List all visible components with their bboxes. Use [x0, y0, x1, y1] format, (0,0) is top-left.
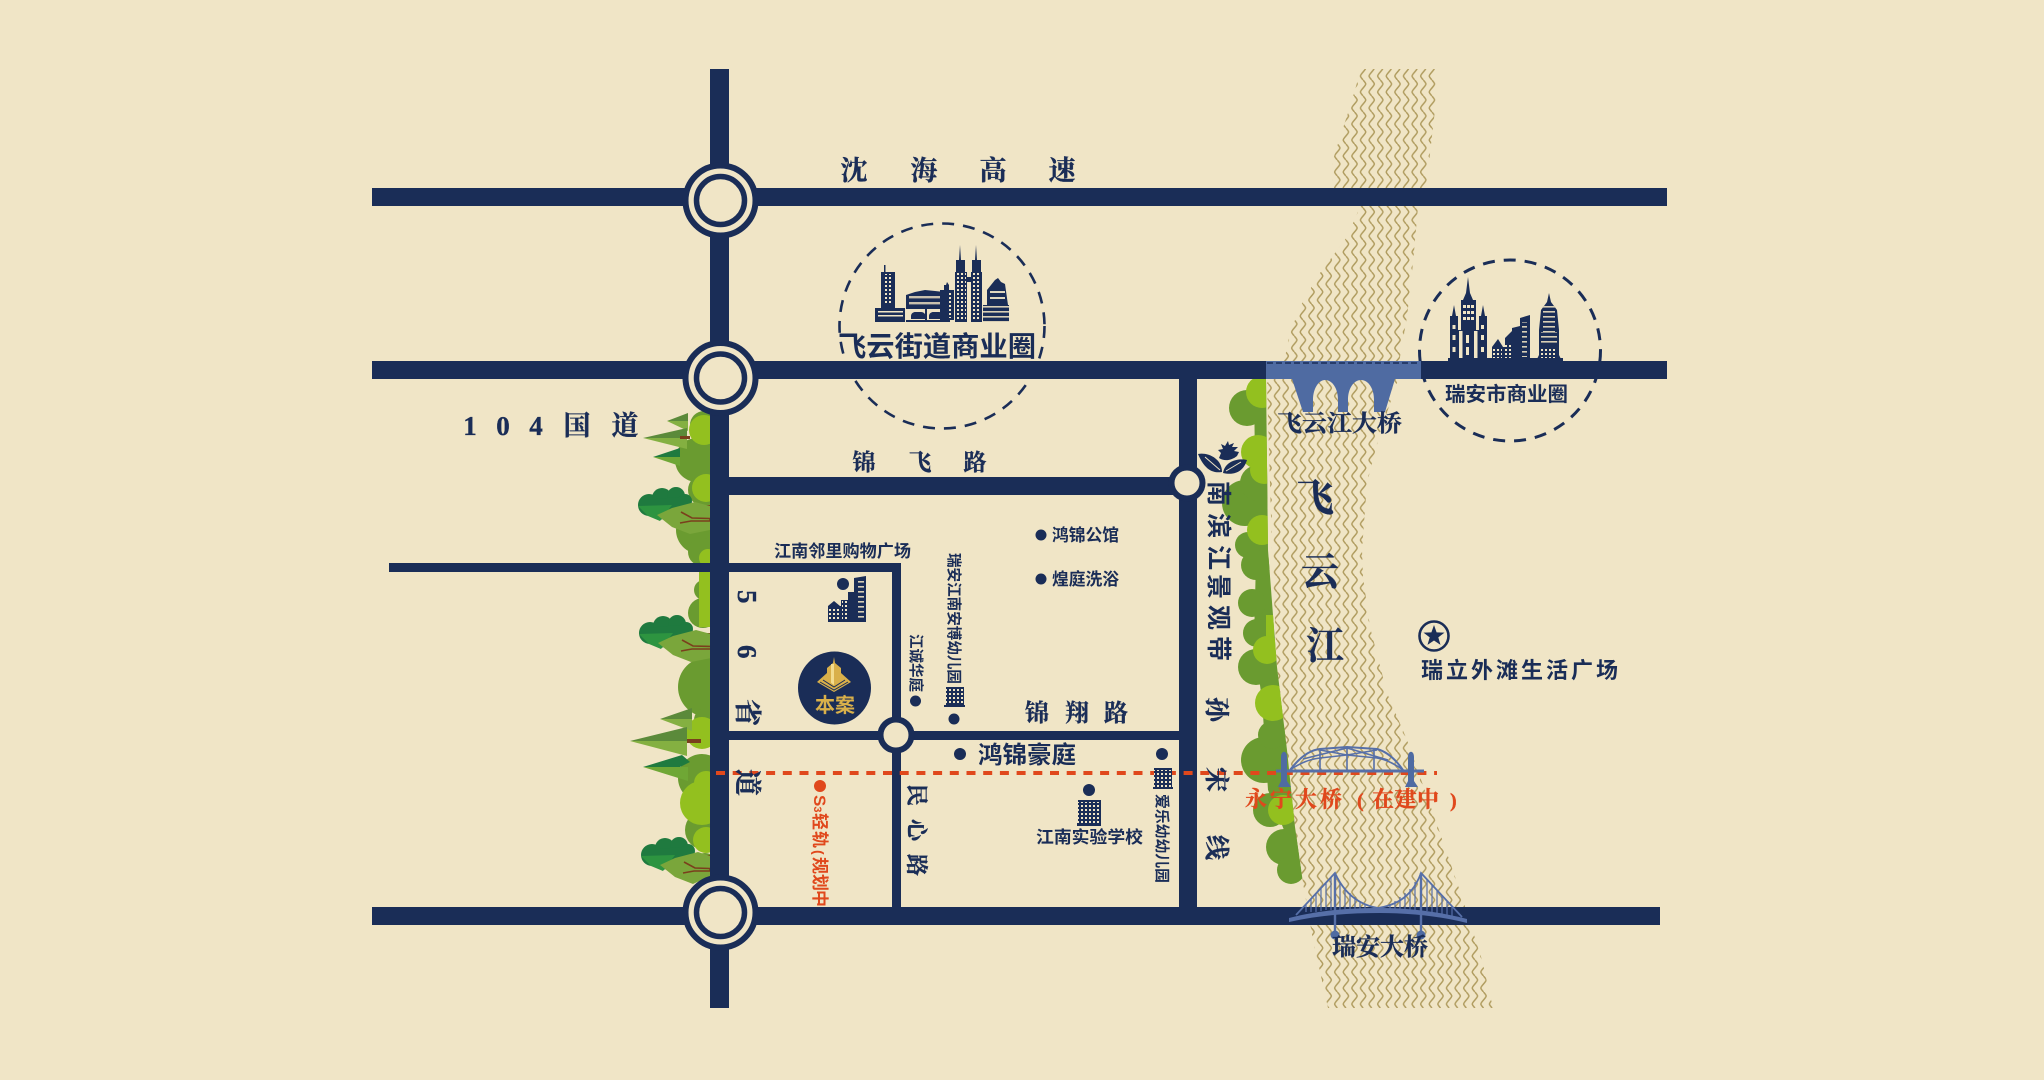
icon: round tree 1	[638, 487, 710, 534]
label: 永宁大桥（在建中）: )	[1450, 790, 1457, 812]
bridge: 瑞安大桥	[1289, 873, 1467, 940]
label: 永宁大桥（在建中）: 永宁大桥	[1245, 787, 1342, 812]
poi: S3 轻轨 规划中: 规	[810, 857, 829, 874]
label: 孙宋线	[1202, 697, 1230, 860]
roundabout 锦翔路	[880, 720, 912, 750]
poi: 爱乐幼幼儿园	[1153, 748, 1173, 883]
label: 民心路: 心	[904, 819, 929, 844]
label: 南滨江景观带: 滨	[1204, 513, 1232, 538]
marker: 本案	[798, 652, 871, 724]
poi: 瑞安江南安博幼儿园: 瑞安江南安博幼儿园	[945, 553, 963, 684]
poi: 江诚华庭: 江诚华庭	[907, 634, 925, 692]
poi: S3 轻轨 规划中: S 3	[810, 795, 829, 812]
label: 江南邻里购物广场: 江南邻里购物广场	[774, 542, 911, 561]
label: 民心路: 路	[904, 854, 929, 876]
label: 南滨江景观带: 带	[1204, 636, 1232, 661]
label: 南滨江景观带: 观	[1204, 605, 1232, 630]
label: 南滨江景观带	[1204, 481, 1232, 661]
poi: 瑞安江南安博幼儿园	[944, 553, 965, 724]
label: 沈海高速: 沈海高速	[840, 155, 1076, 186]
roundabout 锦飞路	[1172, 468, 1202, 498]
label: 瑞立外滩生活广场 with star icon	[1420, 622, 1618, 683]
poi: 煌庭洗浴: 煌庭洗浴	[1052, 569, 1119, 589]
red dashed line: S3 light rail	[716, 771, 1437, 775]
label: 56省道: 6	[732, 645, 762, 658]
label: 104国道: 104国道	[463, 411, 638, 441]
dashed circle: 瑞安市商业圈	[1420, 260, 1600, 441]
label: 56省道	[732, 590, 762, 796]
roundabout south	[686, 878, 756, 948]
road: 锦翔路	[729, 731, 1181, 740]
label: 56省道: 省	[732, 699, 762, 727]
label: 孙宋线: 孙	[1202, 697, 1230, 724]
label: 56省道: 5	[732, 590, 762, 604]
roundabout middle	[686, 343, 756, 413]
label: 民心路	[904, 784, 929, 876]
poi: 爱乐幼幼儿园: 爱乐幼幼儿园	[1153, 794, 1171, 883]
label: 孙宋线: 线	[1202, 835, 1230, 860]
road: 民心路	[892, 563, 901, 913]
bridge: 永宁大桥	[1276, 747, 1424, 787]
poi: S3 轻轨 规划中: 划	[810, 874, 829, 891]
road network	[372, 69, 1667, 1008]
poi: 鸿锦公馆: 鸿锦公馆	[1052, 525, 1119, 545]
river: 飞云江 wave texture	[1267, 69, 1493, 1008]
label: 南滨江景观带: 江	[1204, 545, 1232, 570]
poi: S3 轻轨 规划中: 轻	[810, 813, 829, 830]
icon: pine trees middle	[630, 708, 701, 781]
icon: skyline 瑞安	[1448, 277, 1563, 361]
icon: round tree 2	[639, 615, 711, 662]
poi: 鸿锦豪庭: 鸿锦豪庭	[978, 741, 1076, 769]
riverside green belt	[1222, 376, 1305, 884]
poi: 江南实验学校: 江南实验学校	[1036, 827, 1143, 847]
icon: leaf logo	[1198, 441, 1247, 474]
label: 本案: 本案	[815, 694, 855, 717]
label: 瑞安大桥: 瑞安大桥	[1332, 934, 1428, 961]
label: 瑞立外滩生活广场 with star icon: 瑞立外滩生活广场	[1421, 658, 1618, 683]
road: 孙宋线	[1179, 379, 1197, 919]
trees along 56 provincial road	[630, 411, 710, 884]
label: 永宁大桥（在建中）	[1245, 787, 1457, 812]
poi: S3 轻轨 规划中	[810, 780, 830, 907]
road: 锦飞路	[729, 477, 1189, 495]
label: 瑞安市商业圈: 瑞安市商业圈	[1445, 382, 1568, 406]
icon: pine trees top	[643, 413, 690, 466]
label: 永宁大桥（在建中）: (	[1357, 790, 1364, 812]
poi: S3 轻轨 规划中: 中	[810, 890, 829, 907]
road: 104国道 east-west	[372, 361, 1667, 379]
label: 孙宋线: 宋	[1202, 767, 1230, 792]
label: 锦翔路: 锦翔路	[1025, 700, 1128, 727]
icon: round tree 3	[641, 837, 710, 884]
icon: building near 江南邻里	[828, 576, 866, 622]
label: 飞云江大桥: 飞云江大桥	[1277, 411, 1402, 436]
label: 飞云街道商业圈: 飞云街道商业圈	[838, 331, 1036, 362]
poi: S3 轻轨 规划中: 轨	[810, 831, 830, 848]
label: 南滨江景观带: 景	[1204, 574, 1232, 599]
label: 56省道: 道	[732, 769, 762, 796]
poi: S3 轻轨 规划中: (	[811, 850, 827, 855]
icon: gold tower logo	[817, 657, 851, 692]
label: 飞云江: 飞	[1296, 478, 1334, 520]
icon: skyline 飞云	[875, 245, 1009, 322]
roundabout north	[686, 166, 756, 236]
label: 永宁大桥（在建中）: 在建中	[1372, 787, 1439, 812]
label: 飞云江: 云	[1301, 552, 1341, 594]
road: 邻里 west branch	[389, 563, 901, 572]
poi: 江南实验学校	[1036, 784, 1143, 847]
label: 南滨江景观带: 南	[1204, 481, 1232, 506]
road: 沈海高速	[372, 188, 1667, 206]
label: 民心路: 民	[904, 784, 929, 806]
road: south expressway	[372, 907, 1660, 925]
label: 锦飞路: 锦飞路	[852, 450, 986, 475]
bridge: 飞云江大桥	[1266, 361, 1421, 412]
label: 飞云江: 江	[1306, 626, 1344, 668]
dashed circle: 飞云街道商业圈	[840, 224, 1044, 428]
road: 56省道	[710, 69, 729, 1008]
